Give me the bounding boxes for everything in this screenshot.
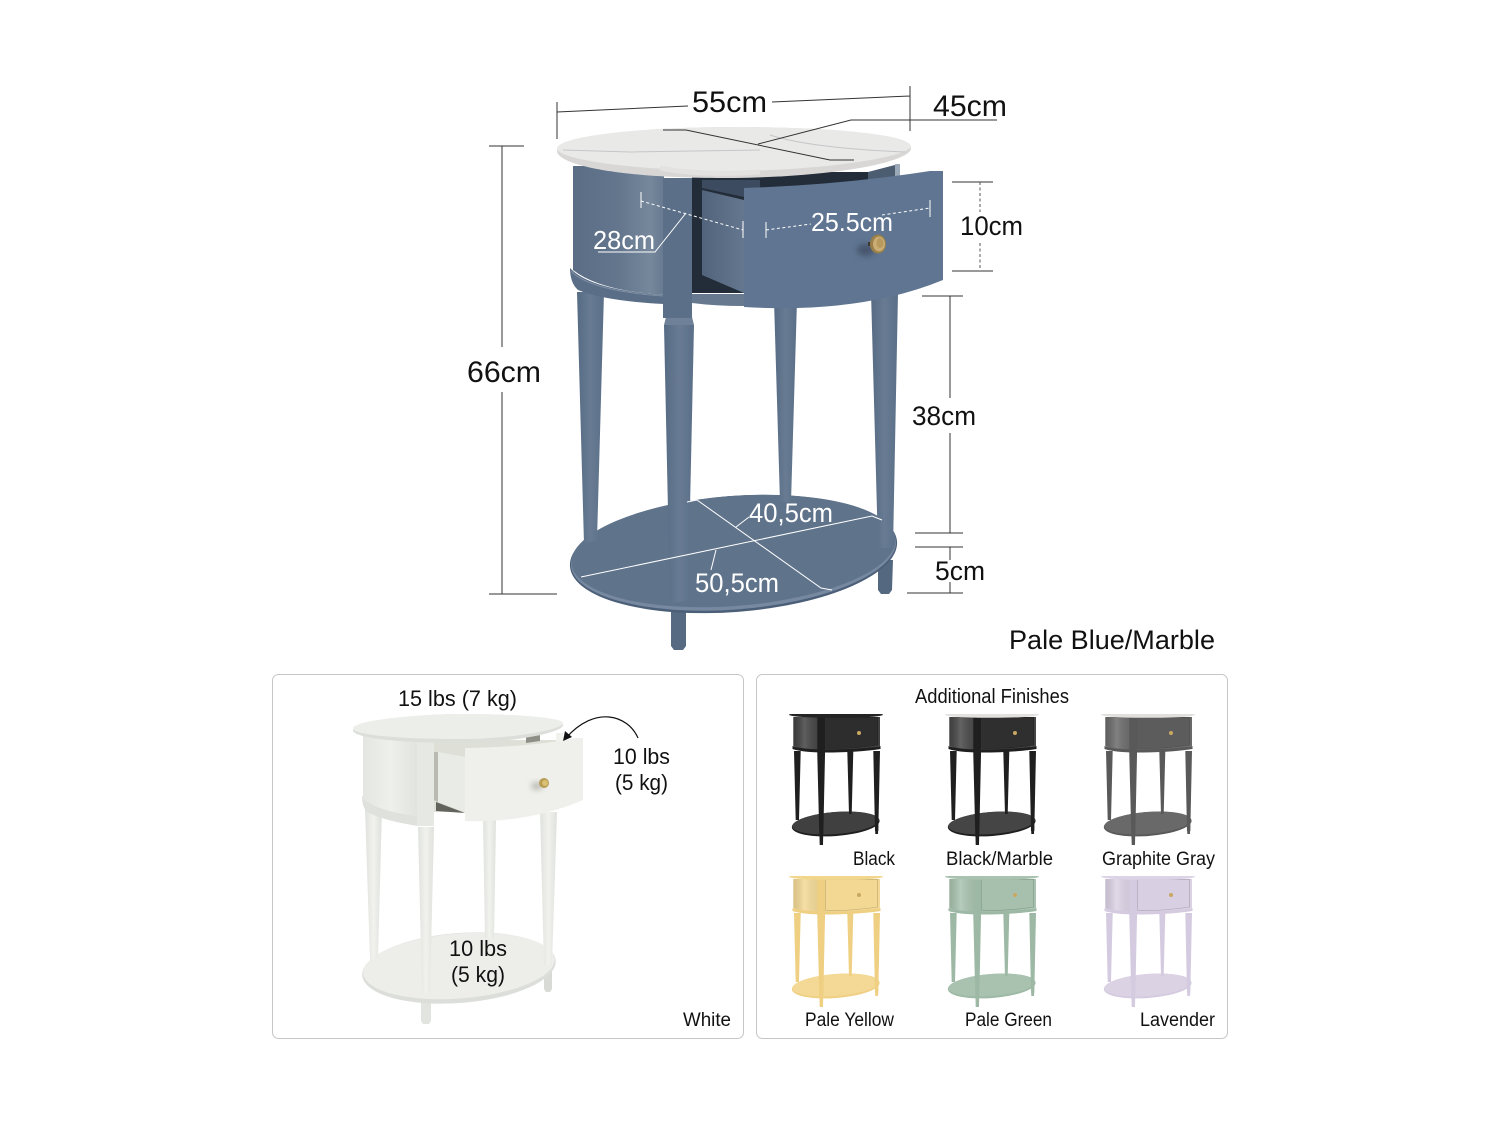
white table [353,714,583,1024]
front leg [664,317,694,604]
back centre leg [774,300,797,502]
leg height dimension: 38cm: 38cm [912,401,976,431]
body base band [570,268,664,304]
shelf depth dimension: 40,5cm: 40,5cm [749,498,833,528]
swatch: Lavender [1101,876,1216,1031]
foot height dimension: 5cm: 5cm [935,556,985,586]
drawer depth dimension: 28cm: 28cm [593,225,655,255]
drawer side [702,190,744,293]
swatch: Pale Green [945,876,1052,1031]
swatch: Black/Marble [945,714,1053,870]
open drawer front [744,171,943,308]
drawer width dimension: 25.5cm: 25.5cm [811,207,893,237]
shelf load label: 10 lbs [449,936,507,961]
drawer load label [613,744,670,795]
back wall right of drawer [868,165,895,180]
table body [573,166,664,295]
band right of post [692,294,744,306]
shelf load label [449,936,507,987]
swatch: Pale Green: Pale Green [965,1010,1052,1031]
swatch: Pale Yellow [789,876,894,1031]
drawer depth dimension: 28cm [593,192,743,255]
height dimension: 66cm: 66cm [467,356,541,389]
leg height dimension: 38cm [912,296,976,533]
shelf load label: (5 kg) [451,962,505,987]
back left leg [577,292,604,544]
swatch: Graphite Gray [1101,714,1215,870]
right foot [878,560,893,594]
drawer height dimension: 10cm: 10cm [960,211,1023,241]
width dimension: 55cm [557,86,910,139]
band highlight [571,271,664,296]
back right leg [871,292,898,548]
lower shelf [566,484,901,624]
shelf width dimension: 50,5cm [581,516,882,598]
swatch: Pale Yellow: Pale Yellow [805,1010,894,1031]
finish label: Pale Blue/Marble: Pale Blue/Marble [1009,625,1215,655]
foot height dimension: 5cm [907,547,985,593]
drawer knob [857,234,886,256]
upper cavity wall [702,180,760,197]
shelf width dimension: 50,5cm: 50,5cm [695,568,779,598]
drawer width dimension: 25.5cm [766,200,930,238]
swatch: Black [789,714,895,870]
top load label: 15 lbs (7 kg) [398,686,517,711]
depth dimension: 45cm: 45cm [933,90,1007,123]
width dimension: 55cm: 55cm [692,86,767,119]
marble top [557,127,911,178]
panel: additional finishes [756,674,1228,1038]
front foot [671,605,686,650]
drawer load label: 10 lbs [613,744,670,769]
height dimension: 66cm [467,146,557,594]
drawer cavity [692,172,896,293]
depth dimension: 45cm [663,90,1007,160]
panel heading: Additional Finishes [915,686,1069,708]
swatch: Graphite Gray: Graphite Gray [1102,849,1215,870]
shelf depth dimension: 40,5cm [687,498,833,590]
swatch: Black/Marble: Black/Marble [946,849,1053,870]
swatch: Lavender: Lavender [1140,1010,1216,1031]
front post [663,178,692,318]
finish label: White: White [683,1010,731,1031]
drawer load label: (5 kg) [615,770,668,795]
drawer height dimension: 10cm [952,182,1023,271]
main table: pale blue and marble [557,127,943,650]
swatch: Black: Black [853,849,895,870]
body sliver right of drawer [895,164,900,177]
arrow to drawer [563,717,638,741]
panel: weight capacity [272,674,744,1038]
